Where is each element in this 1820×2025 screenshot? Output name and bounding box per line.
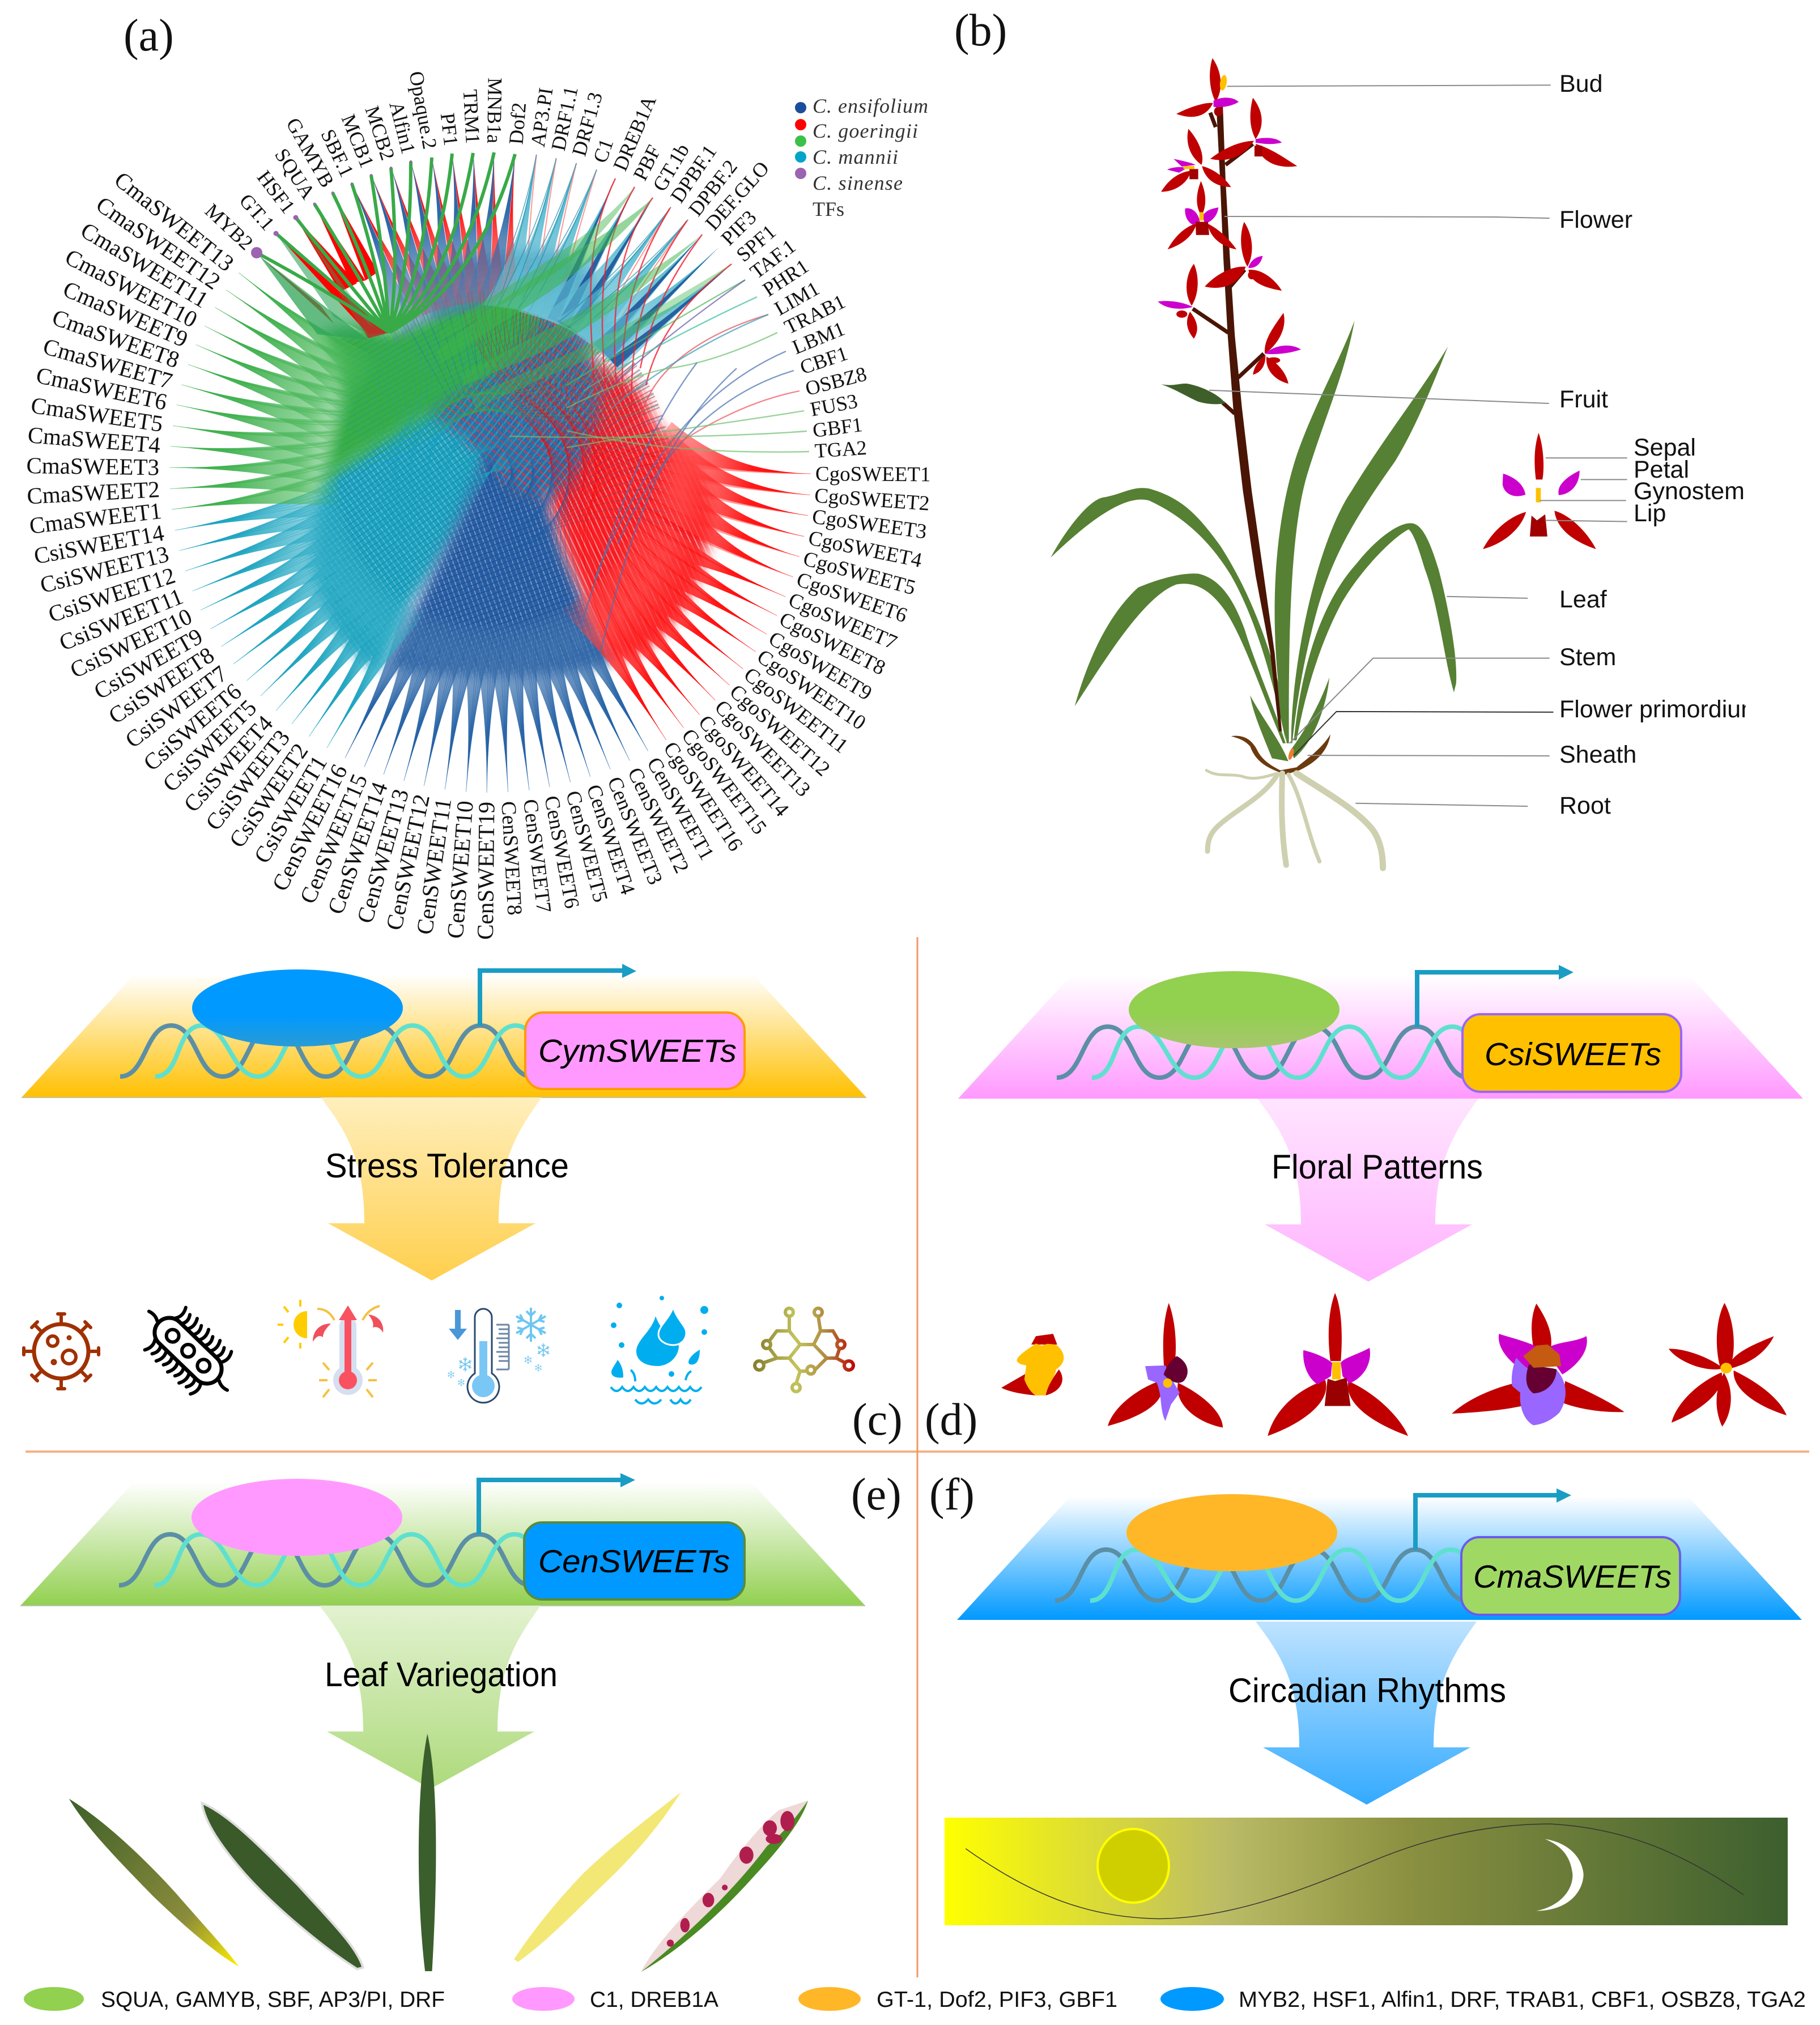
TF labels: Opaque.2: [405, 69, 441, 151]
legend: transcription factor families: SQUA, GAMYB, SBF, AP3/PI, DRF: [101, 1988, 445, 2012]
leaf 4: [514, 1792, 681, 1962]
label: (c): (c): [852, 1395, 903, 1445]
icon: virus: [24, 1314, 99, 1389]
TF labels: MYB2: [201, 199, 258, 254]
Cen labels: CenSWEET8: [496, 801, 526, 916]
Cgo labels: CgoSWEET3: [811, 505, 928, 544]
gene box: [1461, 1537, 1680, 1615]
flower 4: [1452, 1304, 1625, 1426]
flow arrow: [1256, 1622, 1477, 1805]
gene name: CenSWEETs: [538, 1543, 730, 1580]
Csi labels: CsiSWEET13: [37, 541, 171, 598]
node labels: PIF3: [717, 206, 761, 250]
DNA helix: [119, 1534, 565, 1585]
plant part labels: Stem: [1559, 644, 1616, 671]
promoter plate: [20, 1482, 865, 1606]
plant part labels: Gynostem: [1634, 478, 1745, 505]
promoter plate: [958, 975, 1803, 1099]
fruit: [1161, 384, 1226, 404]
rhythm curve and moon: [966, 1824, 1744, 1918]
flower 1: [1001, 1334, 1064, 1396]
plant part labels: Sheath: [1559, 741, 1636, 768]
Cma labels: CmaSWEET11: [76, 217, 213, 313]
red wedges at upper-left TFs: [260, 193, 389, 338]
TF labels: [201, 69, 507, 254]
chord diagram: TF–SWEET regulatory links: [26, 69, 931, 940]
gene box: [1462, 1014, 1681, 1092]
Cma labels: CmaSWEET1: [28, 497, 163, 539]
Cma labels: CmaSWEET4: [27, 422, 161, 458]
gene name: CymSWEETs: [538, 1033, 737, 1069]
transcription factor ellipse: [1129, 971, 1340, 1048]
branches: [1193, 113, 1264, 414]
legend: transcription factor families: GT-1, Dof2, PIF3, GBF1: [877, 1988, 1117, 2012]
node labels: CenSWEET14: [322, 778, 393, 917]
node labels: TGA2: [814, 436, 868, 462]
node labels: Dof2: [504, 101, 530, 145]
thin links from right-side TFs: [510, 280, 809, 652]
gene box: [525, 1012, 745, 1089]
node labels: GBF1: [811, 413, 864, 442]
Cen labels: CenSWEET4: [582, 782, 639, 897]
panel e: leaf variegation: [20, 1473, 865, 1972]
Cgo labels: CgoSWEET10: [752, 645, 870, 735]
legend: species colours: [795, 95, 928, 220]
Csi labels: CsiSWEET7: [120, 660, 232, 753]
Cen labels: CenSWEET6: [539, 794, 584, 911]
Cma labels: CmaSWEET3: [26, 452, 159, 480]
node labels: PHR1: [759, 254, 813, 301]
panel b: orchid plant illustration: [1051, 58, 1627, 868]
red long strands on the right: [590, 178, 732, 408]
fans: Csi SWEET nodes (teal): [123, 218, 671, 757]
transcription factor ellipse: [192, 1479, 402, 1556]
promoter plate: [22, 974, 866, 1097]
panel d: floral patterns: [958, 965, 1803, 1436]
transcription start arrow: [1417, 965, 1574, 1027]
Cgo labels: CgoSWEET14: [694, 711, 793, 821]
Cgo labels: CgoSWEET11: [739, 663, 852, 758]
legend: species colours: C. goeringii: [813, 120, 918, 142]
Cma labels: CmaSWEET7: [40, 333, 175, 394]
icon: water: [611, 1296, 708, 1403]
flowers on the spike: [1158, 58, 1301, 384]
legend: species colours: C. ensifolium: [813, 95, 928, 117]
node labels: LIM1: [771, 277, 823, 320]
fans: Cen SWEET nodes (blue): [329, 226, 803, 839]
heading: Circadian Rhythms: [1228, 1671, 1506, 1709]
icon: molecule: [755, 1308, 853, 1392]
Csi labels: CsiSWEET10: [66, 603, 196, 683]
heading: Leaf Variegation: [325, 1656, 558, 1694]
node labels: [26, 69, 931, 940]
TF labels: MCB1: [337, 111, 379, 171]
fans: Cma SWEET nodes (green): [151, 133, 672, 542]
panel f: circadian rhythms: [945, 1488, 1802, 1925]
heading: Stress Tolerance: [325, 1147, 569, 1185]
Csi labels: CsiSWEET1: [249, 751, 332, 867]
Cgo labels: CgoSWEET16: [658, 738, 747, 856]
DNA helix: [1057, 1027, 1503, 1078]
TF labels: SQUA: [270, 144, 320, 203]
label: (d): (d): [925, 1395, 977, 1445]
Csi labels: CsiSWEET2: [224, 738, 313, 852]
legend: transcription factor families: MYB2, HSF1, Alfin1, DRF, TRAB1, CBF1, OSBZ8, TGA2: [1239, 1988, 1806, 2012]
Cen labels: CenSWEET5: [561, 789, 612, 905]
Cen labels: [496, 754, 718, 916]
TF labels: MNB1a: [483, 78, 507, 143]
Cen labels: CenSWEET1: [642, 754, 718, 864]
green strands from TFs to hub: [257, 152, 515, 333]
Cma labels: CmaSWEET5: [29, 392, 165, 437]
legend: species colours: TFs: [813, 198, 844, 220]
Cgo labels: CgoSWEET9: [764, 627, 876, 705]
icon: sun: [1098, 1829, 1169, 1903]
leaf 5: [641, 1801, 808, 1972]
flow arrow: [1257, 1099, 1478, 1282]
Cgo labels: CgoSWEET1: [815, 462, 931, 486]
legend: species colours: C. mannii: [813, 146, 898, 168]
promoter plate: [957, 1496, 1802, 1620]
Csi labels: CsiSWEET6: [138, 678, 246, 776]
node labels: LBM1: [789, 317, 848, 359]
flow arrow: [321, 1097, 542, 1280]
gene name: CsiSWEETs: [1485, 1036, 1661, 1073]
Csi labels: CsiSWEET5: [158, 694, 261, 797]
Cgo labels: CgoSWEET4: [806, 526, 924, 572]
transcription factor ellipse: [1126, 1494, 1337, 1571]
node labels: CenSWEET16: [266, 760, 352, 895]
leaf 1: [69, 1799, 239, 1967]
plant part labels: Flower primordium: [1559, 696, 1761, 723]
flower variants: [1001, 1293, 1787, 1436]
legend: transcription factor families: [24, 1987, 1806, 2012]
leader lines: [1209, 85, 1627, 806]
legend: transcription factor families: C1, DREB1A: [590, 1988, 718, 2012]
green-teal wedges at upper-left TFs: [260, 218, 374, 340]
TF labels: HSF1: [253, 166, 300, 218]
plant leaves: [1051, 321, 1456, 761]
Cma labels: CmaSWEET13: [109, 166, 239, 276]
flower 2: [1108, 1303, 1223, 1428]
plant part labels: Petal: [1634, 456, 1689, 483]
flower primordium: [1287, 748, 1295, 760]
plant part labels: Root: [1559, 792, 1611, 819]
dissected flower parts: [1483, 433, 1596, 549]
Cgo labels: CgoSWEET6: [793, 568, 910, 627]
node labels: CenSWEET13: [351, 786, 414, 926]
label: (e): (e): [851, 1470, 902, 1520]
Cma labels: CmaSWEET6: [34, 361, 169, 415]
TF node dots: [251, 160, 412, 258]
plant part labels: Fruit: [1559, 386, 1608, 413]
node labels: CenSWEET12: [381, 792, 435, 933]
node labels: GT.1b: [648, 139, 694, 195]
leaf 3: [419, 1734, 436, 1971]
Cma labels: [26, 166, 239, 539]
Cgo labels: CgoSWEET12: [725, 680, 834, 781]
flow arrow: [320, 1606, 541, 1789]
node labels: CenSWEET19: [472, 802, 499, 940]
node labels: FUS3: [809, 389, 860, 421]
Cgo labels: CgoSWEET8: [776, 607, 889, 680]
Cgo labels: CgoSWEET13: [710, 696, 815, 802]
node labels: CenSWEET15: [294, 770, 372, 907]
Cen labels: CenSWEET2: [623, 764, 694, 877]
label: (a): (a): [124, 11, 174, 61]
node labels: DRF1.1: [547, 84, 582, 153]
Cma labels: CmaSWEET8: [49, 304, 183, 373]
central mass of overlapping links: [303, 240, 723, 687]
gene box: [524, 1522, 745, 1599]
Cen labels: CenSWEET3: [602, 773, 667, 888]
dividers: [25, 937, 1809, 1977]
label: (f): (f): [929, 1470, 975, 1520]
transcription start arrow: [479, 1473, 635, 1534]
node labels: TRAB1: [781, 290, 849, 339]
plant part labels: Flower: [1559, 206, 1632, 233]
Csi labels: CsiSWEET14: [32, 520, 166, 569]
TF labels: GAMYB: [282, 114, 339, 191]
node labels: CBF1: [797, 342, 851, 378]
fans: Cgo SWEET nodes (red): [401, 272, 857, 748]
icon: bacterium: [127, 1291, 249, 1410]
node labels: DRF1.3: [568, 90, 607, 159]
Cgo labels: CgoSWEET5: [801, 547, 918, 600]
Cma labels: CmaSWEET12: [92, 191, 226, 295]
Csi labels: CsiSWEET9: [90, 623, 207, 704]
flower stem: [1216, 105, 1282, 731]
Cen labels: CenSWEET7: [518, 798, 555, 914]
transcription factor ellipse: [192, 969, 403, 1046]
node labels: PBF: [628, 142, 665, 184]
flower 3: [1268, 1293, 1408, 1436]
plant part labels: [1559, 70, 1761, 819]
Cma labels: CmaSWEET2: [26, 476, 160, 509]
plant part labels: Leaf: [1559, 586, 1608, 613]
TF labels: TRM1: [459, 89, 484, 144]
node labels: CenSWEET10: [442, 800, 478, 939]
DNA helix: [1055, 1550, 1502, 1601]
label: (b): (b): [954, 6, 1007, 56]
icon: heat thermometer: [278, 1300, 383, 1397]
legend: species colours: C. sinense: [813, 172, 903, 194]
node labels: DPBF.1: [666, 141, 721, 207]
sheath: [1231, 734, 1330, 775]
TF labels: Alfin1: [385, 99, 420, 156]
Csi labels: CsiSWEET3: [200, 725, 295, 835]
Csi labels: [32, 520, 332, 867]
Cgo labels: CgoSWEET7: [785, 588, 900, 654]
plant part labels: Lip: [1634, 500, 1666, 527]
plant part labels: Sepal: [1634, 434, 1696, 461]
Csi labels: CsiSWEET4: [178, 710, 278, 817]
TF labels: SBF.1: [316, 126, 359, 181]
green bands into the hub from upper-right TFs: [436, 187, 732, 408]
TF labels: MCB2: [361, 103, 399, 163]
node labels: SPF1: [732, 220, 780, 266]
Cma labels: CmaSWEET9: [59, 275, 192, 352]
flower 5: [1669, 1303, 1787, 1427]
plant part labels: Bud: [1559, 70, 1603, 97]
node labels: DEF.GLO: [701, 157, 773, 235]
node labels: AP3.PI: [526, 86, 558, 148]
transcription start arrow: [480, 964, 636, 1026]
Csi labels: CsiSWEET11: [56, 583, 186, 656]
roots: [1206, 771, 1383, 868]
node labels: C1: [589, 136, 618, 166]
node labels: OSBZ8: [803, 362, 869, 400]
day-night gradient bar: [945, 1818, 1788, 1925]
fans: TF nodes: [321, 150, 738, 375]
DNA helix: [120, 1026, 567, 1077]
node labels: DPBF.2: [684, 155, 742, 220]
leaf 2: [202, 1803, 363, 1969]
TF labels: PF1: [436, 112, 462, 147]
gene name: CmaSWEETs: [1473, 1559, 1672, 1595]
leaf variants: [69, 1734, 808, 1972]
Cgo labels: CgoSWEET15: [677, 725, 771, 839]
Cma labels: CmaSWEET10: [61, 244, 202, 333]
node labels: TAF.1: [746, 235, 800, 283]
icon: cold thermometer: [448, 1308, 549, 1403]
Csi labels: CsiSWEET8: [104, 641, 219, 729]
transcription start arrow: [1415, 1488, 1571, 1550]
node labels: CenSWEET11: [411, 797, 456, 936]
Cgo labels: [658, 462, 931, 856]
heading: Floral Patterns: [1272, 1148, 1483, 1186]
panel c: stress tolerance: [22, 964, 866, 1410]
Cgo labels: CgoSWEET2: [814, 484, 930, 516]
node labels: DREB1A: [609, 92, 661, 174]
Csi labels: CsiSWEET12: [45, 562, 178, 627]
TF labels: GT.1: [235, 189, 279, 235]
